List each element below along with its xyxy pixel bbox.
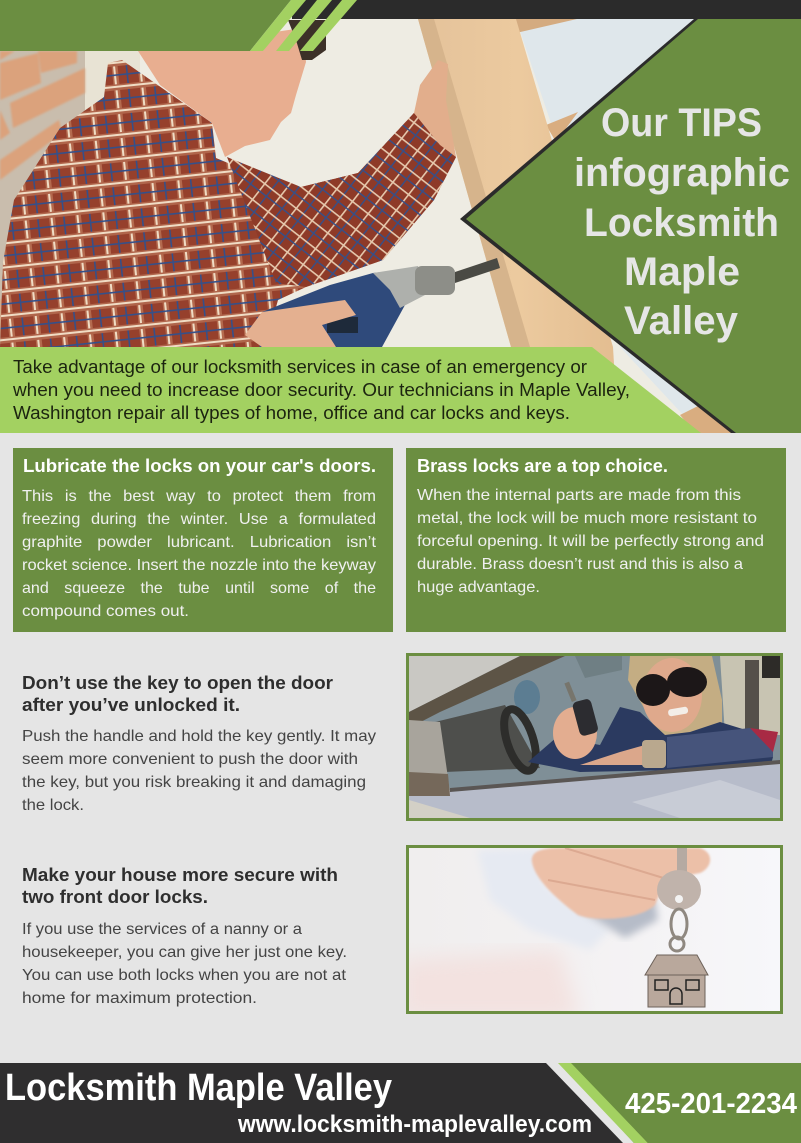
title: Maple xyxy=(624,250,740,294)
title: Our TIPS xyxy=(601,101,762,145)
title: Locksmith xyxy=(584,201,779,245)
body: brass xyxy=(417,487,764,596)
hand xyxy=(532,848,710,919)
intro text: when you need to increase door security. Our technicians in Maple Valley, xyxy=(12,380,630,400)
title arrow panel xyxy=(460,19,801,433)
intro text: Washington repair all types of home, office and car locks and keys. xyxy=(13,403,570,423)
title xyxy=(574,101,790,343)
head xyxy=(138,28,306,157)
body: two locks: housekeeper, you can give her just one key. xyxy=(22,944,347,961)
body: key tip: seem more convenient to push the door with xyxy=(22,751,358,768)
body: brass: When the internal parts are made from this xyxy=(417,487,741,504)
title: Valley xyxy=(624,299,739,343)
jacket xyxy=(528,707,773,772)
tip: two front door locks xyxy=(22,865,347,1007)
heading: key tip: after you’ve unlocked it. xyxy=(22,695,240,715)
drill xyxy=(262,270,405,347)
key xyxy=(677,848,687,876)
body: lubricate: compound comes out. xyxy=(22,603,189,620)
footer phone: 425-201-2234 xyxy=(625,1088,797,1120)
hand on door xyxy=(414,60,456,157)
intro text xyxy=(12,357,630,423)
heading: lubricate: Lubricate the locks on your car's doors. xyxy=(23,456,376,476)
body: lubricate: This is the best way to protect them from xyxy=(22,488,376,505)
body: lubricate: and squeeze the tube until some of the xyxy=(22,580,376,597)
body: two locks xyxy=(22,921,347,1007)
footer website: www.locksmith-maplevalley.com xyxy=(237,1111,592,1138)
heading: two locks: Make your house more secure with xyxy=(22,865,338,885)
sunglasses xyxy=(636,667,707,706)
shirt xyxy=(0,60,456,347)
hair xyxy=(628,656,722,736)
key ring xyxy=(671,909,687,939)
body: two locks: If you use the services of a nanny or a xyxy=(22,921,302,938)
hand on drill xyxy=(245,300,356,347)
body: brass: durable. Brass doesn’t rust and this is also a xyxy=(417,556,743,573)
heading: brass: Brass locks are a top choice. xyxy=(417,456,668,476)
body: key tip: Push the handle and hold the key gently. It may xyxy=(22,728,376,745)
intro banner xyxy=(0,347,701,433)
body: lubricate: rocket science. Insert the nozzle into the keyway xyxy=(22,557,376,574)
body: brass: huge advantage. xyxy=(417,579,540,596)
heading: key tip xyxy=(22,673,333,715)
body: two locks: home for maximum protection. xyxy=(22,990,257,1007)
body: brass: metal, the lock will be much more resistant to xyxy=(417,510,757,527)
body: two locks: You can use both locks when you are not at xyxy=(22,967,347,984)
tip: do not use the key to open the door xyxy=(22,673,376,814)
hero photo: locksmith drilling a door xyxy=(0,19,801,433)
heading: two locks xyxy=(22,865,338,907)
body: lubricate xyxy=(22,488,377,620)
brick wall xyxy=(0,51,85,347)
heading: key tip: Don’t use the key to open the door xyxy=(22,673,333,693)
body: key tip: the lock. xyxy=(22,797,84,814)
body: key tip: the key, but you risk breaking it and damaging xyxy=(22,774,366,791)
panel: brass locks xyxy=(406,448,786,632)
key fob xyxy=(572,698,599,737)
body: lubricate: graphite powder lubricant. Lubrication isn’t xyxy=(22,534,377,551)
top bar: dark strip xyxy=(292,0,801,19)
body: lubricate: freezing during the winter. Use a formulated xyxy=(22,511,376,528)
heading: two locks: two front door locks. xyxy=(22,887,208,907)
panel: lubricate the locks xyxy=(13,448,393,632)
footer xyxy=(0,1063,801,1143)
house keychain xyxy=(645,955,708,975)
body: key tip xyxy=(22,728,376,814)
arm and hand xyxy=(580,745,660,765)
intro text: Take advantage of our locksmith services in case of an emergency or xyxy=(13,357,587,377)
photo: hand giving house key xyxy=(400,845,783,1020)
top banner: green block with stripes xyxy=(0,0,357,51)
photo: woman in car holding key xyxy=(406,653,783,821)
title: infographic xyxy=(574,151,790,195)
car door xyxy=(409,762,780,818)
footer company name: Locksmith Maple Valley xyxy=(5,1067,392,1109)
face xyxy=(642,658,702,732)
body: brass: forceful opening. It will be perfectly strong and xyxy=(417,533,764,550)
